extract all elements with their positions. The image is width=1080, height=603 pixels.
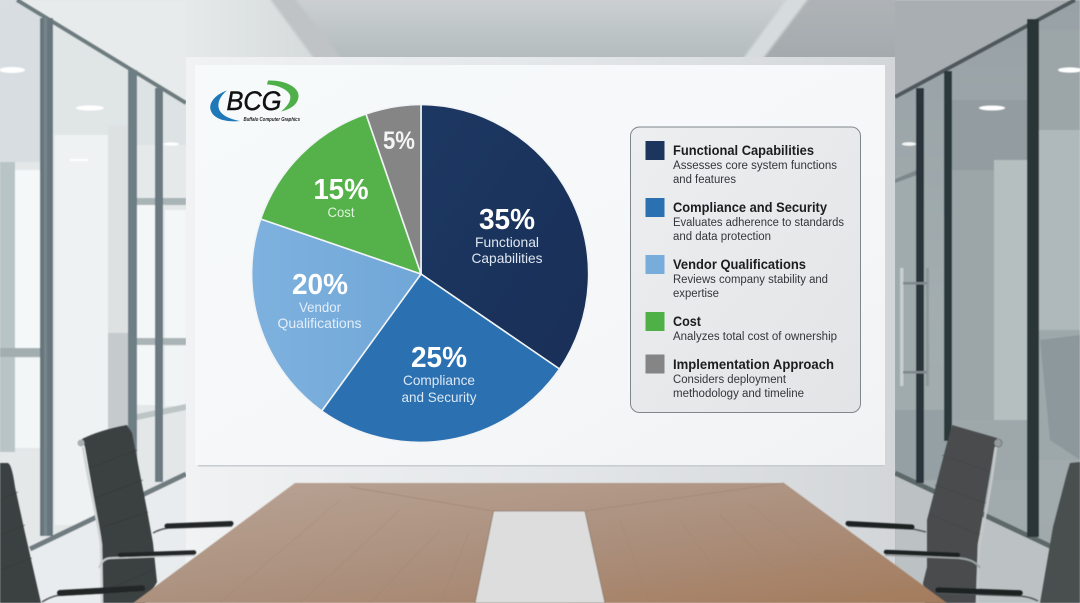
- slice: Compliance and Security 25%: [322, 274, 560, 442]
- logo letters: BCG: [226, 86, 282, 116]
- pie label: 35% Functional Capabilities: 35%: [479, 204, 535, 236]
- right glass wall background: [890, 0, 1080, 603]
- logo tagline: Buffalo Computer Graphics: [244, 117, 300, 123]
- pie chart: [252, 104, 589, 442]
- pie label: 25% Compliance and Security: 25%: [411, 342, 467, 374]
- legend item: Compliance and Security: Evaluates adherence to standards: [673, 217, 844, 229]
- pie label: 25% Compliance and Security: Compliance: [403, 372, 475, 388]
- slice: Vendor Qualifications 20%: [252, 219, 421, 411]
- legend item: Functional Capabilities: Assesses core system functions: [673, 160, 837, 172]
- ceiling: [269, 0, 895, 57]
- icon: door handle: [900, 268, 929, 386]
- legend item: Cost: Cost: [673, 313, 701, 329]
- logo green swoosh: [267, 80, 299, 112]
- pie label: 35% Functional Capabilities: Capabilities: [472, 250, 542, 266]
- pie label: 25% Compliance and Security: [402, 342, 476, 405]
- legend item: Compliance and Security: [646, 198, 844, 243]
- chair: left far: [0, 463, 143, 603]
- pie label: 15% Cost: [314, 174, 369, 220]
- legend item: Cost: [646, 312, 837, 343]
- chair: right far: [1040, 462, 1080, 603]
- pie label: 25% Compliance and Security: and Security: [402, 389, 476, 405]
- pie label: 20% Vendor Qualifications: Qualifications: [278, 315, 362, 331]
- legend item: Vendor Qualifications: [646, 255, 828, 300]
- legend item: Functional Capabilities: Functional Capabilities: [673, 142, 814, 158]
- legend panel: [630, 127, 860, 412]
- left glass wall background: [0, 0, 190, 603]
- pie label: 15% Cost: 15%: [314, 174, 369, 206]
- pie label: 35% Functional Capabilities: [472, 204, 542, 266]
- slice: Functional Capabilities 35%: [421, 104, 589, 369]
- pie label: 20% Vendor Qualifications: [278, 269, 362, 331]
- pie label: 20% Vendor Qualifications: 20%: [292, 269, 348, 301]
- legend item: Implementation Approach: methodology and timeline: [673, 388, 804, 400]
- legend item: Cost: Analyzes total cost of ownership: [673, 331, 837, 343]
- legend item: Compliance and Security: and data protection: [673, 231, 771, 243]
- legend item: Vendor Qualifications: Vendor Qualifications: [673, 256, 806, 272]
- back wall: [186, 57, 895, 603]
- legend item: Functional Capabilities: [646, 141, 837, 186]
- pie label: 35% Functional Capabilities: Functional: [475, 234, 539, 250]
- legend item: Implementation Approach: [646, 354, 834, 400]
- conference table: [133, 483, 947, 603]
- chair: right near: [848, 425, 1038, 603]
- legend item: Functional Capabilities: and features: [673, 174, 736, 186]
- legend item: Implementation Approach: Implementation Approach: [673, 356, 834, 372]
- chair: left near: [78, 425, 232, 603]
- panel: whiteboard: [195, 65, 885, 466]
- pie label: 20% Vendor Qualifications: Vendor: [299, 299, 341, 315]
- legend item: Implementation Approach: Considers deployment: [673, 374, 787, 386]
- legend item: Compliance and Security: Compliance and Security: [673, 199, 827, 215]
- pie label: 5%: 5%: [383, 127, 415, 155]
- legend item: Vendor Qualifications: expertise: [673, 288, 719, 300]
- slice: Implementation Approach 5%: [366, 104, 421, 274]
- slice: Cost 15%: [261, 114, 421, 274]
- logo blue swoosh: [210, 90, 240, 121]
- pie label: 15% Cost: Cost: [328, 204, 355, 220]
- logo: BCG Buffalo Computer Graphics: [210, 80, 300, 123]
- legend item: Vendor Qualifications: Reviews company stability and: [673, 274, 828, 286]
- table centre inlay: [475, 511, 605, 603]
- legend box: [630, 127, 860, 412]
